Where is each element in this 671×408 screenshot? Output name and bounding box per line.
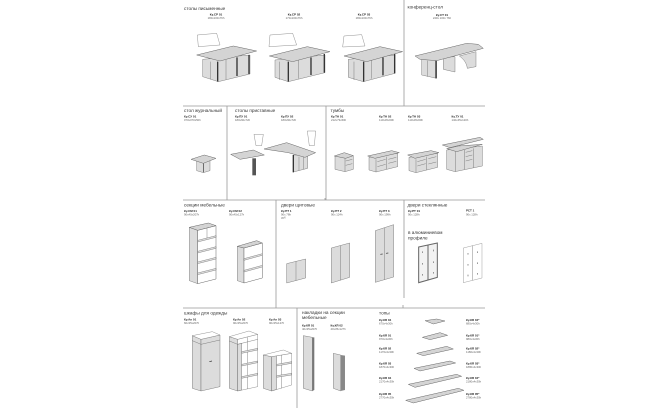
panel door low group	[281, 209, 306, 283]
tops right labels: 1180x4x30h	[466, 350, 481, 354]
heading: section overlays: накладки на секции	[302, 310, 345, 315]
tops right labels: 2780x4x30h	[466, 396, 482, 400]
glass door framed group	[408, 209, 437, 283]
tops plates	[406, 319, 464, 403]
wardrobe 2 group	[229, 318, 258, 391]
extension table 1 group: Ку.ПУ 01	[235, 114, 248, 118]
tops right labels: 980x4x30h	[466, 337, 480, 341]
tops right labels: Ку.КЯ 02*	[466, 346, 480, 350]
tops right labels: 1880x4x30h	[466, 365, 482, 369]
pedestal 1 group	[331, 114, 353, 172]
section 2 group: 90x40x127h	[229, 212, 245, 216]
panel door tall group: Ку.ПТ 3	[379, 209, 390, 213]
tops right labels: 680x4x30h	[466, 322, 480, 326]
aluminium profile note: в алюминиевом	[408, 230, 443, 235]
glass door framed group: Ку.РТ 01	[408, 209, 420, 213]
pedestal 3 group	[408, 114, 439, 173]
tops left labels: Ку.КЯ 05	[379, 392, 392, 396]
glass door frameless group: 90x 128h	[466, 212, 478, 216]
section 1 group: Ку.СМ 01	[184, 209, 197, 213]
pedestal 1 group: 212x73x60h	[331, 118, 347, 122]
desk 3 group: 180x100x76h	[356, 16, 373, 20]
glass door frameless group: РСТ 1	[466, 208, 475, 212]
wardrobe 3 group: Ку.Аn 03	[269, 318, 282, 322]
glass door framed group: 90x 128h	[408, 212, 420, 216]
extension table 2 group	[264, 114, 316, 172]
tops left labels: Ку.КЯ 04	[379, 376, 392, 380]
tops right labels: Ку.КЯ 01*	[466, 334, 480, 338]
panel door mid group: Ку.ПТ 2	[331, 209, 342, 213]
pedestal 1 group: Ку.ТН 01	[331, 114, 344, 118]
overlay panel tall group: 40x35x207h	[302, 327, 318, 331]
overlay panel short group: Ку.КЯ 02	[330, 324, 343, 328]
extension table 1 group: 180x60x72h	[235, 118, 251, 122]
desk 2 group: 170x100x76h	[286, 16, 303, 20]
extension table 1 group	[231, 114, 264, 175]
panel door tall group: 90x 199h	[379, 212, 391, 216]
tops left labels	[379, 318, 395, 400]
wardrobe 3 group	[263, 318, 292, 391]
panel door low group: Ку.ПТ 1	[281, 209, 292, 213]
wardrobe 2 group: Ку.Аn 02	[233, 318, 246, 322]
heading: pedestals: тумбы	[330, 108, 345, 113]
tops left labels: Ку.КЯ 03	[379, 362, 392, 366]
extension table 2 group: Ку.ПУ 02	[281, 114, 294, 118]
panel door low group: 90x 78h	[281, 212, 291, 216]
panel door mid group	[331, 209, 350, 283]
desk 2 group: Ку.СР 02	[288, 12, 301, 16]
tops left labels: 2770x4x30h	[379, 396, 395, 400]
heading: section overlays: мебельные	[302, 315, 327, 320]
pedestal 4 group: Ку.ТУ 01	[452, 114, 464, 118]
tops right labels: Ку.КЯ 04*	[466, 318, 480, 322]
wardrobe 1 group: 60x35x207h	[184, 321, 200, 325]
desk 3 group	[343, 12, 403, 82]
desk 3 group: Ку.СР 03	[358, 12, 371, 16]
pedestal 3 group: 110x45x60h	[408, 118, 423, 122]
tops left labels: 670x4x30h	[379, 322, 393, 326]
glass door frameless group	[463, 208, 482, 283]
heading: extension tables: столы приставные	[235, 108, 276, 113]
pedestal 2 group: Ку.ТН 02	[379, 114, 392, 118]
coffee table group: 070x070x50h	[184, 118, 201, 122]
panel door tall group	[375, 209, 394, 282]
tops left labels: 1170x4x30h	[379, 350, 394, 354]
heading: glass doors: двери стеклянные	[408, 202, 448, 208]
section 1 group	[184, 209, 216, 284]
panel door mid group: 90x 124h	[331, 212, 343, 216]
overlay panel short group: 40x35x127h	[330, 327, 346, 331]
heading: coffee table: стол журнальный	[184, 107, 222, 113]
extension table 2 group: 180x60x72h	[281, 118, 297, 122]
desk 1 group: Ку.СР 01	[210, 12, 223, 16]
aluminium profile note: профиле	[408, 236, 428, 240]
tops right labels	[466, 318, 482, 400]
pedestal 3 group: Ку.ТН 03	[408, 114, 421, 118]
overlay panel tall group: Ку.КЯ 01	[302, 324, 315, 328]
heading: tops: топы	[379, 310, 390, 316]
tops right labels: Ку.КЯ 03*	[466, 362, 480, 366]
tops right labels: Ку.КЯ 05*	[466, 392, 480, 396]
pedestal 4 group	[442, 114, 483, 172]
section 2 group: Ку.СМ 02	[229, 209, 242, 213]
pedestal 2 group: 110x45x60h	[379, 118, 394, 122]
overlay panel tall group	[302, 324, 318, 391]
wardrobe 1 group: Ку.Аn 01	[184, 318, 197, 322]
heading: panel doors: двери щитовые	[281, 202, 315, 208]
conference table group: 240х 100х 76h	[433, 16, 452, 20]
tops right labels: Ку.КЯ 04*	[466, 376, 480, 380]
panel door low group: дуб	[281, 216, 286, 220]
wardrobe 1 group	[184, 318, 220, 391]
conference table group: Ку.СТ 01	[436, 13, 448, 17]
tops left labels: 1870x4x30h	[379, 365, 395, 369]
pedestal 2 group	[368, 114, 399, 172]
heading: wardrobes: шкафы для одежды	[184, 310, 228, 316]
wardrobe 2 group: 90x35x207h	[233, 321, 249, 325]
coffee table group: Ку.СУ 01	[184, 114, 197, 118]
tops left labels: 2170x4x30h	[379, 380, 395, 384]
tops left labels: Ку.КЯ 02	[379, 346, 392, 350]
coffee table group	[184, 114, 216, 173]
heading: conference table: конференц-стол	[408, 4, 443, 10]
conference table group	[415, 13, 483, 78]
tops left labels: Ку.КЯ 01	[379, 334, 392, 338]
section 2 group	[229, 209, 262, 283]
wardrobe 3 group: 90x35x127h	[269, 321, 285, 325]
section 1 group: 90x40x207h	[184, 212, 200, 216]
heading: writing desks: столы письменные	[184, 6, 226, 11]
tops left labels: Ку.КЯ 04	[379, 318, 392, 322]
desk 1 group: 180x100x76h	[208, 16, 225, 20]
tops right labels: 2180x4x30h	[466, 380, 482, 384]
heading: furniture sections: секции мебельные	[184, 202, 225, 208]
desk 1 group	[197, 12, 257, 82]
tops left labels: 970x4x30h	[379, 337, 393, 341]
desk 2 group	[269, 12, 330, 82]
overlay panel short group	[330, 324, 346, 391]
pedestal 4 group: 140x45x120h	[452, 118, 469, 122]
